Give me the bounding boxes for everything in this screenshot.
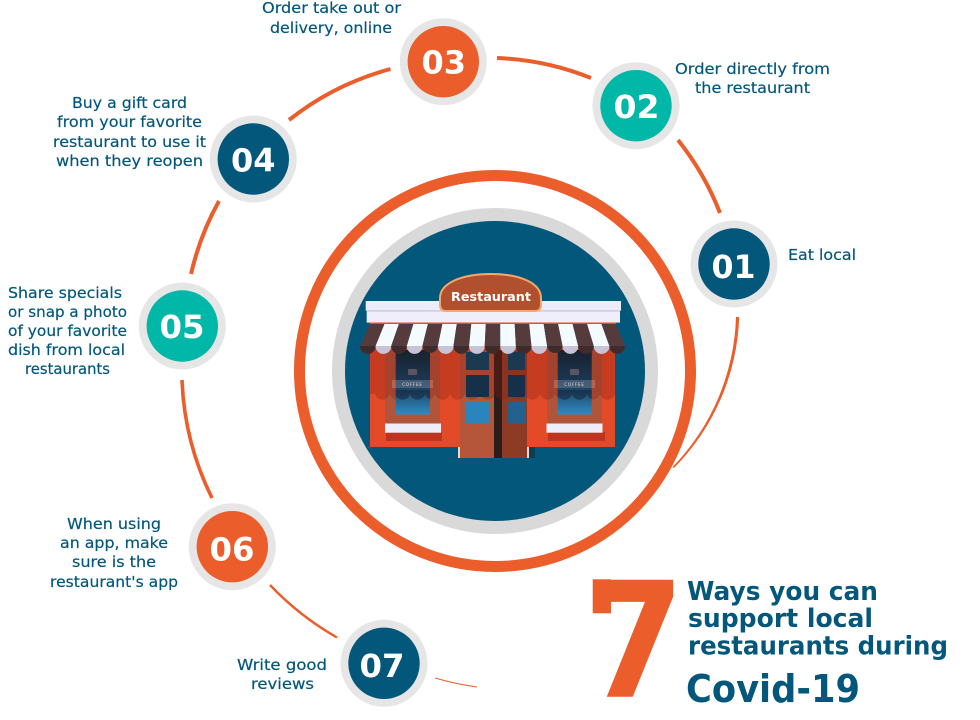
central orange ring [300, 176, 690, 566]
label 05: Share specials [8, 284, 122, 302]
label 07 [237, 656, 327, 693]
step 07 [340, 620, 428, 707]
label 07: Write good [237, 656, 327, 674]
left window glass [392, 350, 433, 414]
title: restaurants during [688, 632, 948, 662]
label 07: reviews [251, 675, 314, 693]
step 01 [690, 220, 778, 308]
restaurant storefront illustration [360, 274, 625, 458]
right window glass [554, 350, 595, 414]
step 07: 07 [360, 647, 404, 685]
label 05: restaurants [25, 360, 110, 378]
step 06 [189, 503, 276, 590]
central badge [332, 208, 658, 534]
step 05 [139, 282, 226, 370]
step 04: 04 [231, 142, 276, 180]
step 02 [592, 62, 680, 149]
restaurant sign [440, 274, 541, 311]
label 05: or snap a photo [8, 303, 127, 321]
label 05: dish from local [8, 341, 125, 359]
label 04: from your favorite [57, 113, 202, 131]
connector arcs between steps [182, 58, 739, 687]
step 01: 01 [712, 248, 756, 286]
left window glass: COFFEE [402, 382, 423, 387]
label 04: Buy a gift card [72, 94, 187, 112]
step 02: 02 [614, 88, 660, 126]
step 04 [210, 116, 297, 202]
title [686, 577, 948, 711]
window frames [385, 350, 605, 441]
step 06: 06 [210, 531, 254, 569]
label 05: of your favorite [8, 322, 127, 340]
step 05: 05 [160, 308, 204, 346]
step 03: 03 [422, 44, 466, 82]
right window glass: COFFEE [564, 382, 585, 387]
label 02: the restaurant [695, 79, 810, 97]
label 01: Eat local [788, 246, 856, 264]
label 03 [262, 0, 402, 37]
title: support local [688, 604, 873, 634]
label 06: an app, make [60, 534, 168, 552]
label 06: restaurant's app [50, 573, 178, 591]
label 04: when they reopen [56, 152, 203, 170]
door panes [466, 352, 525, 424]
label 02: Order directly from [675, 60, 830, 78]
label 03: delivery, online [270, 19, 392, 37]
label 04 [53, 94, 206, 170]
label 04: restaurant to use it [53, 133, 206, 151]
awning [360, 324, 625, 354]
step 03 [400, 18, 487, 105]
awning shadow on facade [370, 345, 615, 400]
label 06: When using [67, 515, 161, 533]
label 02 [675, 60, 830, 97]
label 06: sure is the [72, 553, 156, 571]
title: Ways you can [687, 577, 878, 607]
cornice [366, 301, 621, 325]
restaurant sign: Restaurant [451, 290, 531, 304]
title: Covid-19 [686, 667, 860, 711]
label 05 [8, 284, 127, 378]
door [458, 350, 535, 458]
label 06 [50, 515, 178, 591]
